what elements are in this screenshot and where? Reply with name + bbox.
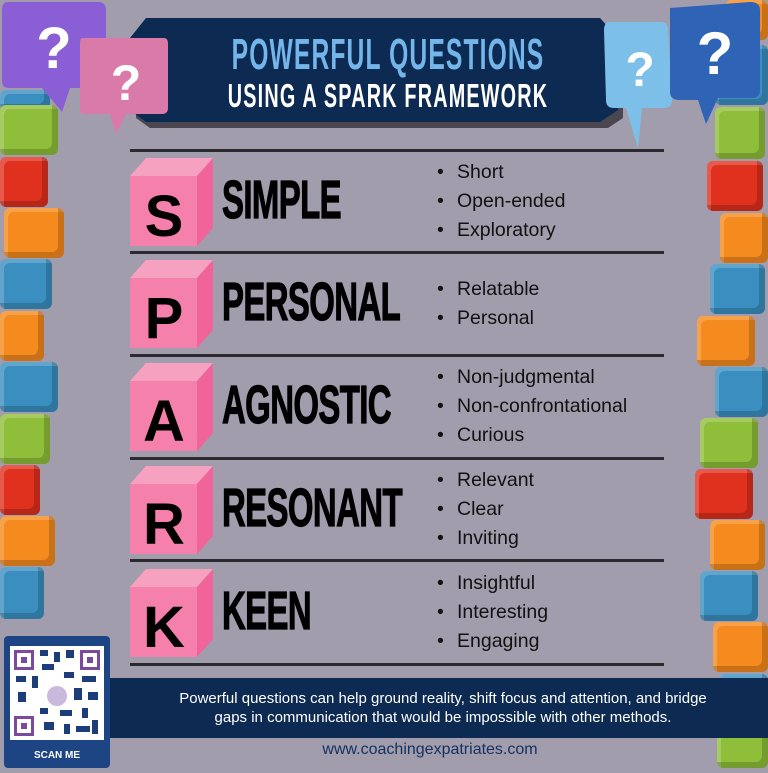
heading: keen: KEEN — [222, 581, 311, 641]
icon: question bubbles left: ? — [36, 16, 72, 81]
icon: cube A — [130, 363, 213, 451]
bullets — [438, 161, 565, 241]
bullets: Interesting — [457, 601, 548, 623]
title line 2: USING A SPARK FRAMEWORK — [228, 77, 548, 114]
row: R Resonant — [130, 466, 534, 554]
bullets: Curious — [457, 424, 524, 446]
icon: question bubbles left: ? — [111, 55, 141, 111]
icon: question bubbles left — [2, 2, 168, 134]
footer banner — [108, 678, 768, 738]
bullets — [438, 366, 627, 446]
icon: cube K — [130, 569, 213, 657]
bullets: Open-ended — [457, 190, 565, 212]
heading: personal: PERSONAL — [222, 272, 400, 332]
bullets: Clear — [457, 498, 504, 520]
title banner — [130, 18, 623, 128]
heading: simple: SIMPLE — [222, 170, 341, 230]
bullets: Relevant — [457, 469, 534, 491]
bullets — [438, 469, 534, 549]
heading: resonant: RESONANT — [222, 478, 402, 538]
bullets: Inviting — [457, 527, 519, 549]
website url: www.coachingexpatriates.com — [322, 741, 538, 758]
QR code — [4, 636, 110, 768]
icon: cube P — [130, 260, 213, 348]
footer banner: Powerful questions can help ground reality, shift focus and attention, and bridge — [179, 690, 707, 707]
left decorative blocks — [0, 90, 64, 619]
heading: agnostic: AGNOSTIC — [222, 375, 391, 435]
footer banner: gaps in communication that would be impossible with other methods. — [215, 709, 671, 726]
bullets: Non-judgmental — [457, 366, 595, 388]
icon: cube S — [130, 158, 213, 246]
right decorative blocks — [695, 0, 768, 768]
row: S Simple — [130, 158, 565, 246]
bullets: Short — [457, 161, 504, 183]
icon: question bubbles right: ? — [697, 20, 733, 87]
bullets: Non-confrontational — [457, 395, 627, 417]
row: A Agnostic — [130, 363, 627, 451]
bullets: Engaging — [457, 630, 539, 652]
bullets: Relatable — [457, 278, 539, 300]
bullets: Exploratory — [457, 219, 556, 241]
row: K Keen — [130, 569, 548, 657]
title line 1: POWERFUL QUESTIONS — [232, 30, 544, 79]
bullets: Personal — [457, 307, 534, 329]
bullets — [438, 278, 539, 329]
icon: question bubbles right: ? — [625, 44, 655, 97]
icon: cube R — [130, 466, 213, 554]
icon: question bubbles right — [604, 2, 760, 148]
QR code: SCAN ME — [34, 750, 80, 761]
row: P Personal — [130, 260, 539, 348]
bullets: Insightful — [457, 572, 535, 594]
bullets — [438, 572, 548, 652]
